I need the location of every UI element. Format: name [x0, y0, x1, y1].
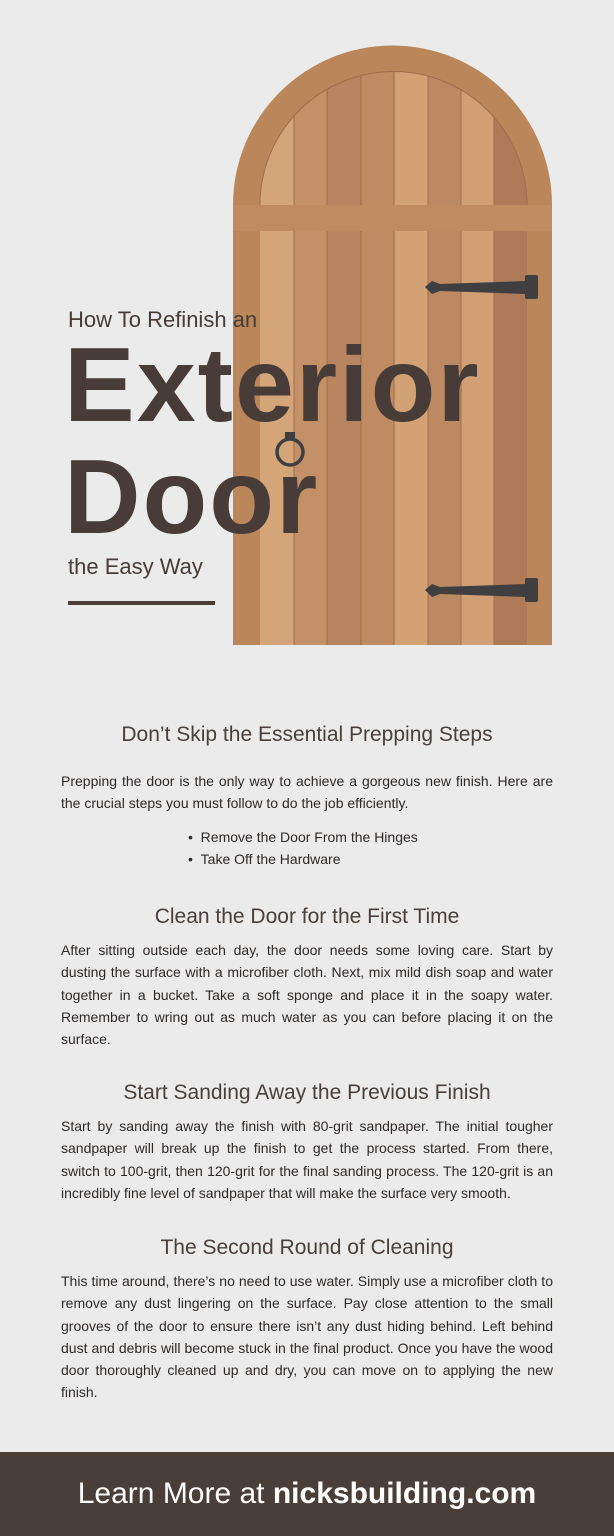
text: sanding: Start by sanding away the finish with 80-grit sandpaper. The initial tougher sandpaper will break up the finish to get the process started. From there, switch to 100-grit, then 120-grit for the final sanding process. The 120-grit is an incredibly fine level of sandpaper that will make the surface very smooth.	[61, 1118, 553, 1201]
icon: lower hinge	[425, 578, 538, 602]
title block: the Easy Way	[68, 554, 203, 579]
text: clean: After sitting outside each day, the door needs some loving care. Start by dusting the surface with a microfiber cloth. Next, mix mild dish soap and water together in a bucket. Take a soft sponge and place it in the soapy water. Remember to wring out as much water as you can before placing it on the surface.	[61, 942, 553, 1047]
footer: Learn More at nicksbuilding.com	[78, 1477, 536, 1510]
title block	[64, 307, 481, 605]
icon: ring handle	[277, 432, 303, 465]
icon: upper hinge	[425, 275, 538, 299]
text: prepping: Prepping the door is the only way to achieve a gorgeous new finish. Here are the crucial steps you must follow to do the job efficiently.	[61, 773, 553, 811]
list: prepping steps: • Remove the Door From the Hinges	[188, 829, 418, 845]
text: second cleaning: This time around, there’s no need to use water. Simply use a microfiber cloth to remove any dust lingering on the surface. Pay close attention to the small grooves of the door to ensure there isn’t any dust hiding behind. Left behind dust and debris will become stuck in the final product. Once you have the wood door thoroughly cleaned up and dry, you can move on to applying the new finish.	[61, 1273, 553, 1400]
heading: clean: Clean the Door for the First Time	[155, 905, 459, 928]
heading: prepping: Don’t Skip the Essential Prepping Steps	[121, 723, 493, 746]
list: prepping steps	[188, 829, 418, 867]
title block: How To Refinish an	[68, 307, 257, 332]
heading: sanding: Start Sanding Away the Previous Finish	[123, 1081, 491, 1104]
heading: second cleaning: The Second Round of Cleaning	[160, 1236, 454, 1259]
footer	[0, 1452, 614, 1536]
title block: Door	[64, 438, 319, 556]
illustration: arched wooden door	[233, 46, 552, 645]
title block: Exterior	[64, 326, 481, 444]
list: prepping steps: • Take Off the Hardware	[188, 851, 340, 867]
